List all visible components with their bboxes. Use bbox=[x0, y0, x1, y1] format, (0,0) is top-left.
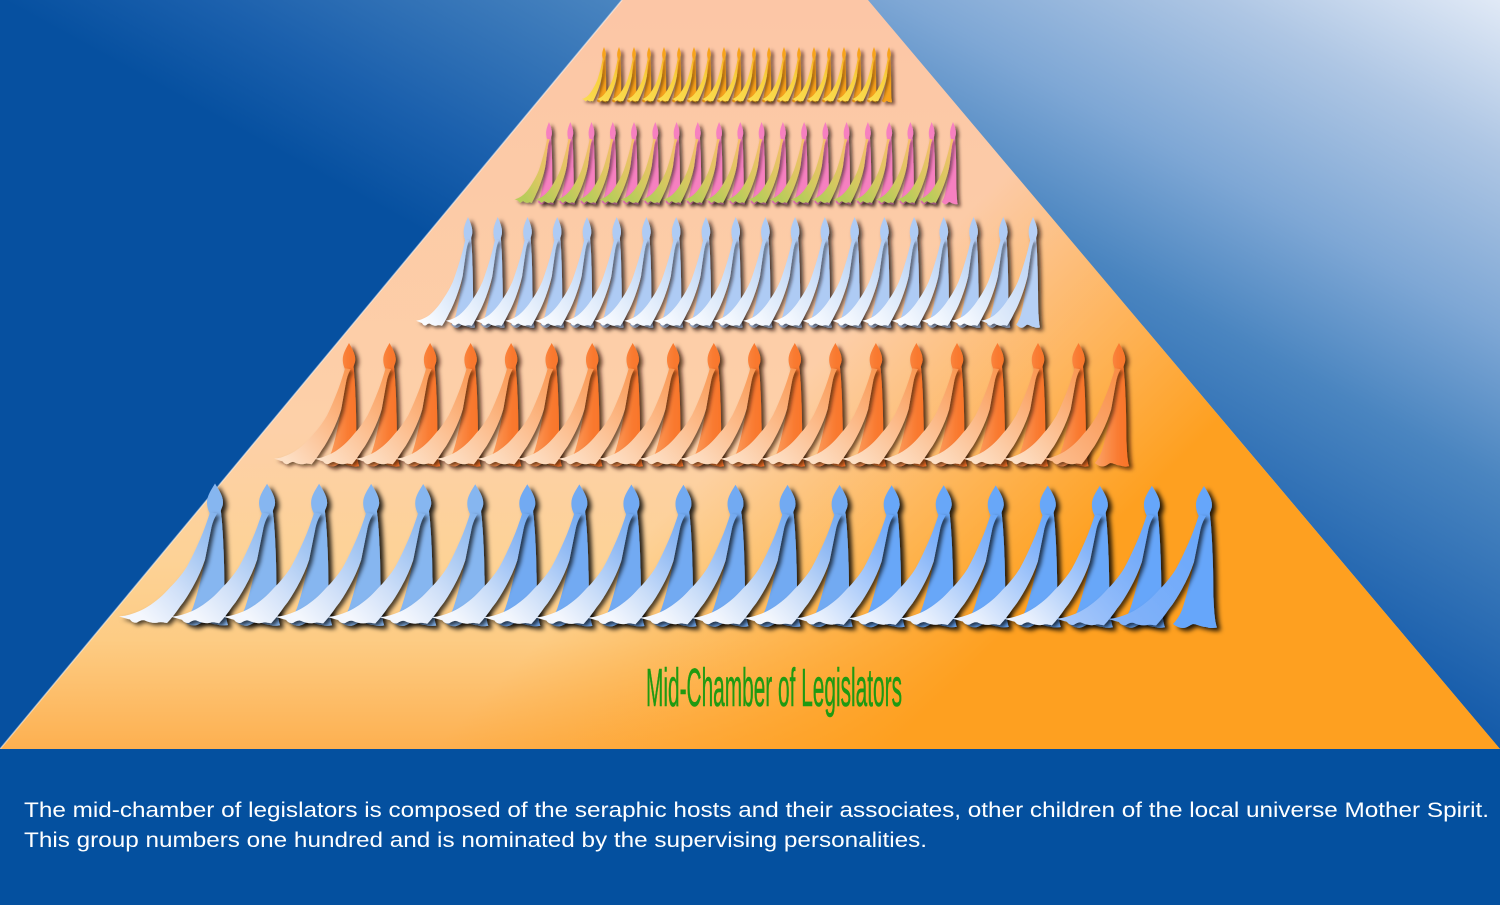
row 4: orange figures bbox=[274, 343, 1129, 467]
row 1: orange and yellow figures bbox=[582, 47, 892, 102]
caption text bbox=[24, 798, 1489, 852]
row 2: pink and green figures bbox=[514, 122, 958, 204]
bottom caption band bbox=[0, 749, 1500, 905]
row 3: pale blue figures bbox=[416, 217, 1040, 328]
caption text: The mid-chamber of legislators is composed of the seraphic hosts and their associates, other children of the local universe Mother Spirit. bbox=[24, 798, 1489, 822]
text: Mid-Chamber of Legislators bbox=[646, 658, 902, 718]
row 5: blue figures bbox=[119, 484, 1217, 628]
caption text: This group numbers one hundred and is nominated by the supervising personalities. bbox=[24, 828, 927, 852]
